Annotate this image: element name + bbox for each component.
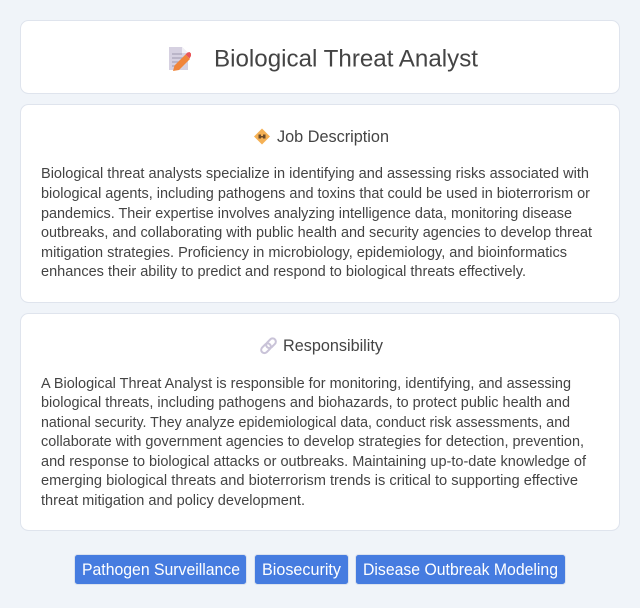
panel: title (20, 20, 620, 94)
text block: responsibility: national security. They analyze epidemiological data, conduct risk assessments, and (41, 415, 570, 431)
text block: job description: Biological threat analysts specialize in identifying and assessing risks associated with (41, 166, 589, 182)
text block: responsibility: A Biological Threat Analyst is responsible for monitoring, identifying, and assessing (41, 376, 571, 392)
panel: responsibility (20, 314, 620, 530)
tag: Disease Outbreak Modeling (356, 554, 566, 584)
text block: job description: outbreaks, and collaborating with public health and security agencies to develop threat (41, 225, 592, 241)
icon: orange diamond (254, 128, 270, 144)
icon: document with pencil (169, 47, 191, 71)
text block: responsibility: threat mitigation and policy development. (41, 493, 305, 509)
panel: job description (20, 104, 620, 302)
tag: Disease Outbreak Modeling: Disease Outbreak Modeling (363, 561, 558, 579)
tag: Biosecurity (254, 554, 348, 584)
heading: job description: Job Description (277, 128, 389, 146)
text block: job description: mitigation strategies. Proficiency in microbiology, epidemiology, and bioinformatics (41, 245, 567, 261)
icon: chain link (260, 337, 277, 354)
text block: job description (41, 166, 592, 280)
text block: responsibility: collaborate with government agencies to develop strategies for detection, prevention, (41, 434, 584, 450)
text block: responsibility: and response to biological attacks or outbreaks. Maintaining up-to-date knowledge of (41, 454, 587, 470)
text block: responsibility: emerging biological threats and bioterrorism trends is critical to supporting effective (41, 473, 578, 489)
heading: responsibility: Responsibility (283, 337, 384, 355)
tag: Pathogen Surveillance (74, 554, 246, 584)
text block: responsibility (41, 376, 587, 509)
heading: title: Biological Threat Analyst (214, 46, 478, 72)
tag: Pathogen Surveillance: Pathogen Surveillance (82, 561, 240, 579)
text block: job description: enhances their ability to predict and respond to biological threats effectively. (41, 264, 526, 280)
text block: responsibility: biological threats, including pathogens and biohazards, to protect public health and (41, 395, 570, 411)
text block: job description: pandemics. Their expertise involves analyzing intelligence data, monitoring disease (41, 206, 572, 222)
text block: job description: biological agents, including pathogens and toxins that could be used in bioterrorism or (41, 186, 590, 202)
tag: Biosecurity: Biosecurity (262, 561, 342, 579)
